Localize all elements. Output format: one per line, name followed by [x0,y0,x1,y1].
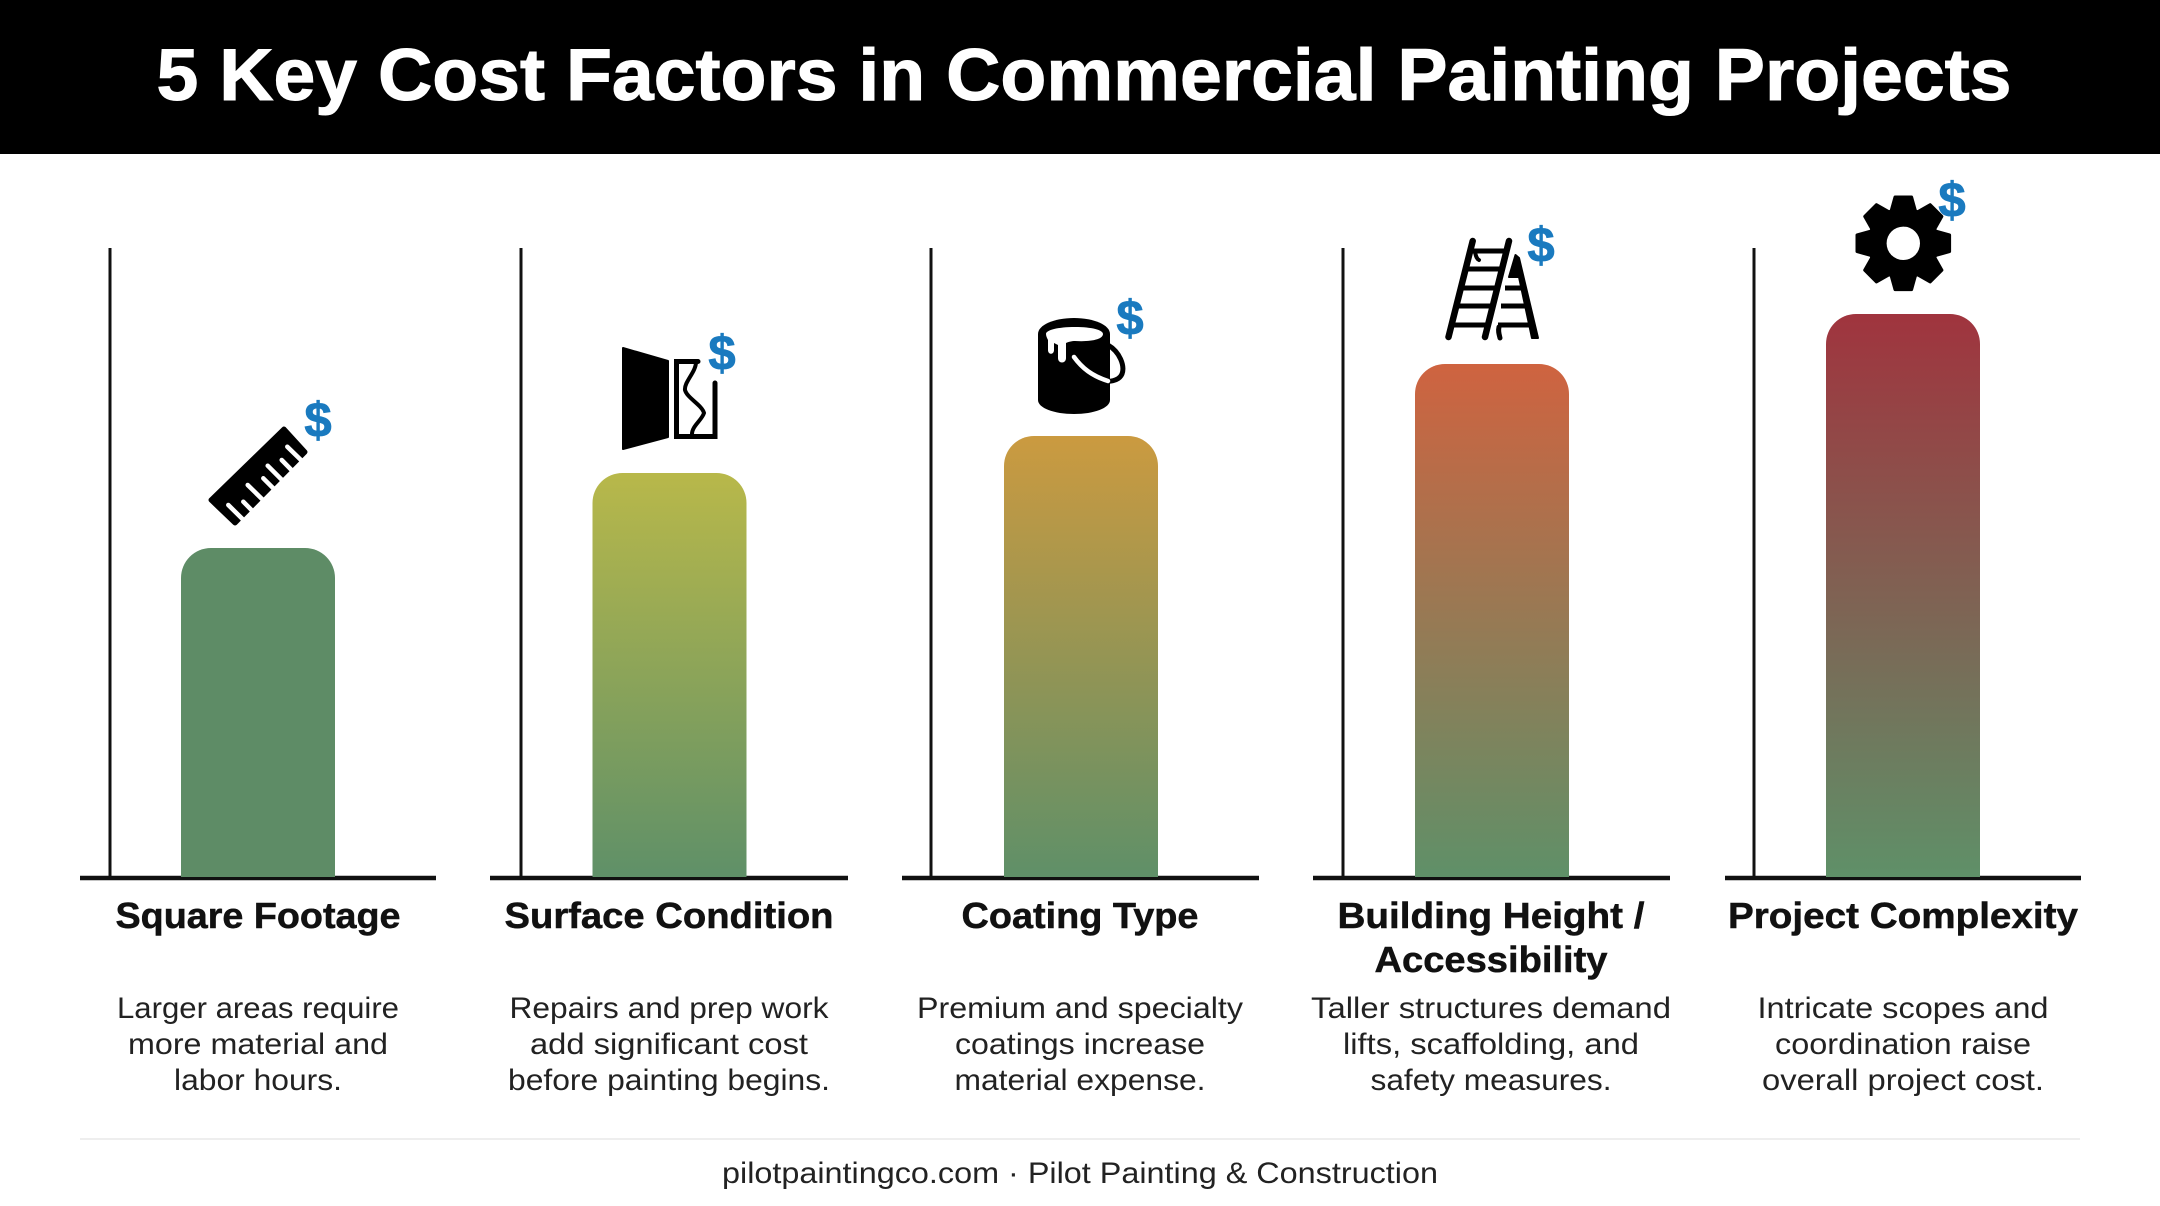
description: building height [1311,992,1671,1097]
description: square footage [117,992,399,1097]
description: surface condition: add significant cost [530,1028,808,1061]
title banner: 5 Key Cost Factors in Commercial Painting Projects [156,35,2012,116]
heading: project complexity: Project Complexity [1728,895,2078,936]
description: square footage: Larger areas require [117,992,399,1025]
description: surface condition [508,992,830,1097]
description: square footage: labor hours. [174,1064,342,1097]
icon: ruler [211,429,305,523]
bar: project complexity [1826,314,1980,877]
bar: surface condition [592,473,746,877]
icon: dollar sign: $ [1116,292,1144,346]
description: project complexity: coordination raise [1775,1028,2031,1061]
description: square footage: more material and [128,1028,388,1061]
heading: surface condition: Surface Condition [504,895,834,936]
description: project complexity: overall project cost. [1762,1064,2044,1097]
description: building height: Taller structures demand [1311,992,1671,1025]
icon: dollar sign: $ [1527,219,1555,273]
panel: building height [1311,219,1671,1097]
panel: square footage [80,248,436,1097]
heading: coating type: Coating Type [962,895,1198,936]
icon: dollar sign: $ [304,394,332,448]
icon: cracked wall and door [623,348,715,449]
description: surface condition: Repairs and prep work [510,992,829,1025]
footer credit: pilotpaintingco.com · Pilot Painting & Construction [722,1157,1438,1190]
panel: coating type [902,248,1259,1097]
description: project complexity [1758,992,2048,1097]
icon: dollar sign: $ [1938,174,1966,228]
title banner [0,0,2160,154]
icon: paint bucket [1038,318,1123,414]
description: coating type [917,992,1243,1097]
panel: project complexity [1725,174,2081,1097]
heading: building height / accessibility: Building Height / [1338,895,1644,936]
description: project complexity: Intricate scopes and [1758,992,2048,1025]
description: coating type: material expense. [954,1064,1206,1097]
panel: surface condition [490,248,848,1097]
description: coating type: coatings increase [955,1028,1205,1061]
icon: ladder [1448,241,1538,338]
description: coating type: Premium and specialty [917,992,1243,1025]
heading: square footage: Square Footage [116,895,400,936]
icon: gear [1857,197,1950,290]
description: building height: safety measures. [1370,1064,1612,1097]
heading: building height / accessibility: Accessibility [1374,939,1608,980]
description: surface condition: before painting begins. [508,1064,830,1097]
bar: building height [1415,364,1569,877]
bar: square footage [181,548,335,877]
icon: dollar sign: $ [708,327,736,381]
bar: coating type [1004,436,1158,877]
heading: building height / accessibility [1338,895,1644,980]
description: building height: lifts, scaffolding, and [1343,1028,1639,1061]
